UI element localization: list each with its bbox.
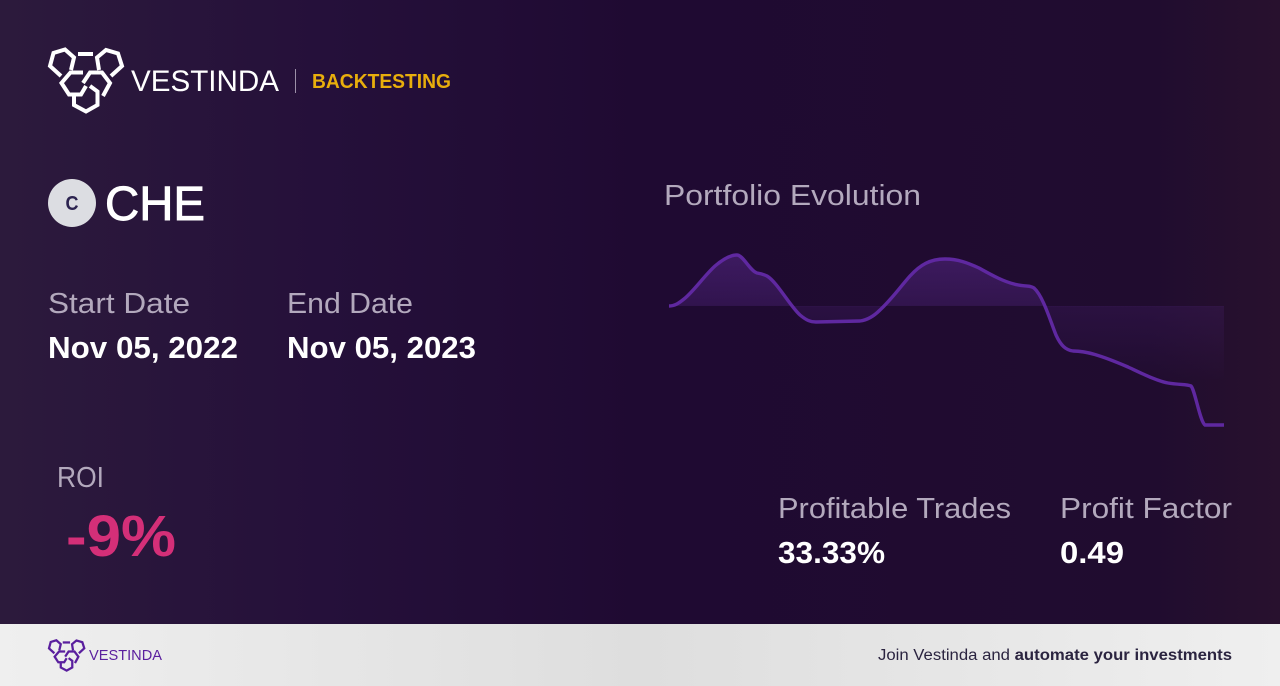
ticker name: CHE	[105, 178, 205, 231]
wordmark: VESTINDA	[131, 65, 279, 98]
heading: backtesting: BACKTESTING	[312, 71, 451, 93]
profit factor	[1060, 493, 1232, 570]
end date: End Date	[287, 288, 413, 320]
header logo: Vestinda	[50, 50, 279, 112]
start date: Start Date	[48, 288, 190, 320]
ROI	[57, 462, 176, 569]
icon: hexagon logo	[50, 50, 122, 112]
end date	[287, 288, 476, 365]
footer call to action: Join Vestinda and automate your investments	[878, 647, 1232, 664]
end date: Nov 05, 2023	[287, 330, 476, 365]
profit factor: 0.49	[1060, 535, 1124, 570]
chart heading: Portfolio Evolution	[664, 180, 921, 212]
ROI: ROI	[57, 462, 104, 494]
divider	[295, 69, 296, 93]
icon: ticker circle: C	[66, 193, 78, 215]
footer	[0, 624, 1280, 686]
line chart: portfolio evolution	[669, 255, 1224, 425]
trend line	[669, 255, 1224, 425]
profitable trades	[778, 493, 1011, 570]
ROI: -9%	[66, 504, 176, 569]
footer logo	[49, 640, 162, 671]
icon: footer hexagon logo	[49, 640, 84, 671]
profitable trades: 33.33%	[778, 535, 885, 570]
area fill	[669, 255, 1224, 425]
ticker	[48, 178, 205, 231]
start date	[48, 288, 238, 365]
profitable trades: Profitable Trades	[778, 493, 1011, 525]
footer wordmark: VESTINDA	[89, 647, 162, 664]
start date: Nov 05, 2022	[48, 330, 238, 365]
profit factor: Profit Factor	[1060, 493, 1232, 525]
icon: ticker circle	[48, 179, 96, 227]
